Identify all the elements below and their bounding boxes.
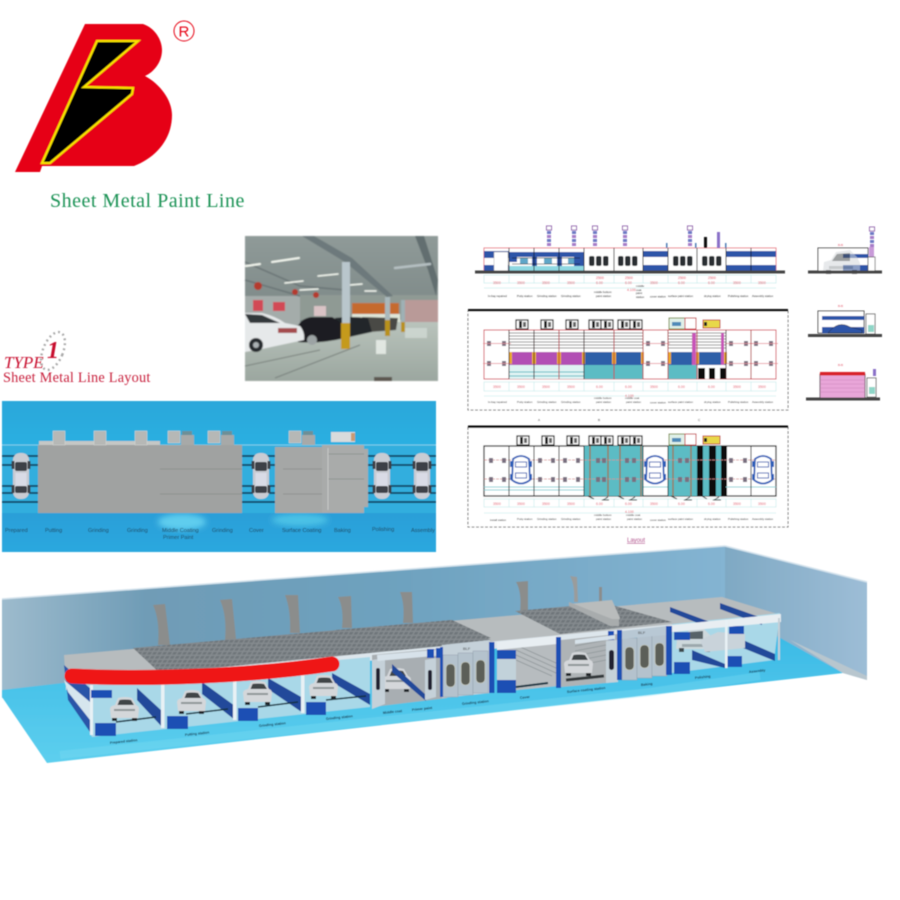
- CAD drawing: floor plan: 6.00: [708, 502, 715, 506]
- station labels: Prepared: [5, 528, 28, 534]
- photo: paint line workshop: [245, 236, 438, 381]
- CAD drawing: floor plan: B: [598, 418, 600, 422]
- equipment on top: [516, 318, 720, 329]
- CAD drawing: floor plan: 3500: [758, 502, 766, 506]
- station labels: middle bottom: [594, 513, 612, 517]
- floor station labels: Polishing: [695, 674, 711, 680]
- label: Layout: Layout: [627, 538, 645, 544]
- station labels: Grinding station: [561, 294, 581, 298]
- booth block: surface coating and baking: [275, 431, 368, 513]
- CAD drawing: front elevation: 3500: [758, 281, 766, 285]
- CAD drawing: roof plan: [468, 309, 788, 410]
- CAD drawing: floor plan: 6.00: [625, 502, 632, 506]
- station labels: In-bay repaired: [488, 294, 507, 298]
- station labels: [488, 396, 774, 404]
- station labels: Grinding station: [561, 517, 581, 521]
- CAD drawing: floor plan: 6.00: [678, 502, 685, 506]
- red annotation stroke: [72, 664, 332, 678]
- logo: red B lightning mark: [15, 21, 194, 172]
- booth block: putting to grinding: [38, 431, 242, 513]
- blue bands: [484, 251, 776, 271]
- CAD drawing: front elevation: 3500: [733, 281, 741, 285]
- exhaust stacks: [546, 226, 726, 248]
- station labels: Grinding station: [537, 517, 557, 521]
- dimension row: [484, 275, 776, 288]
- section one: [808, 227, 882, 274]
- floor station labels: Putting station: [185, 730, 209, 737]
- station labels: paint station: [596, 517, 612, 521]
- station labels: Surface Coating: [282, 528, 321, 534]
- white end bays: [483, 341, 778, 366]
- open booth bay three: [561, 630, 622, 687]
- floor band and rails: [2, 445, 436, 530]
- teal floors: [509, 365, 726, 379]
- station labels: Putty station: [517, 400, 533, 404]
- CAD drawing: floor plan: 4.100: [625, 510, 634, 514]
- station labels: Grinding: [127, 528, 148, 534]
- open booth bay two: [497, 636, 561, 693]
- CAD drawing: roof plan: 4.100: [625, 394, 634, 398]
- station labels: In-bay repaired: [488, 400, 507, 404]
- CAD drawing: front elevation: 6.00: [625, 281, 632, 285]
- heading: Type 1 Sheet Metal Line Layout: [3, 329, 151, 386]
- CAD drawing: floor plan: 3500: [650, 502, 658, 506]
- station labels: Grinding: [88, 528, 109, 534]
- 3D rendering: paint line hall: [2, 546, 867, 763]
- CAD drawing: front elevation: 6.00: [596, 281, 603, 285]
- paint booth door face two: BLF: [638, 630, 646, 635]
- yellow posts: [509, 352, 727, 364]
- CAD drawing: front elevation: 2500: [625, 276, 633, 280]
- station labels: Assembly station: [752, 517, 774, 521]
- CAD drawing: front elevation: 3500: [567, 281, 575, 285]
- section three: B-B: [838, 363, 843, 367]
- CAD drawing: floor plan: 6.00: [596, 502, 603, 506]
- station labels: paint: [636, 291, 642, 295]
- CAD drawing: roof plan: 6.00: [625, 385, 632, 389]
- blue car outlines: [510, 456, 774, 484]
- station labels: Polishing station: [728, 400, 749, 404]
- CAD drawing: roof plan: 3500: [542, 385, 550, 389]
- station labels: Middle Coating: [162, 528, 199, 534]
- paint booth door face one: BLF: [463, 646, 471, 651]
- floor station labels: Grinding station: [259, 721, 286, 728]
- panel: top-view blue layout: [2, 401, 436, 552]
- cell dividers: [509, 330, 751, 379]
- CAD drawing: roof plan: 3500: [493, 385, 501, 389]
- label: layout subtitle: Sheet Metal Line Layout: [3, 370, 151, 386]
- logo: red B body: [15, 24, 172, 172]
- station labels: Polishing station: [728, 294, 749, 298]
- right wall: [725, 546, 867, 680]
- station labels: drying station: [704, 517, 721, 521]
- CAD drawing: floor plan: [468, 418, 788, 544]
- station labels: Assembly station: [752, 400, 774, 404]
- station labels: Grinding: [212, 528, 233, 534]
- floor station labels: Grinding station: [326, 714, 353, 721]
- station labels: Polishing station: [728, 517, 749, 521]
- station labels: Primer Paint: [163, 535, 194, 541]
- section three: [806, 363, 880, 400]
- logo: black bolt with yellow outline: [42, 41, 138, 163]
- CAD drawing: floor plan: 3500: [542, 502, 550, 506]
- floor: [2, 607, 843, 763]
- front face band: [66, 614, 781, 690]
- station labels: surface paint station: [668, 517, 693, 521]
- door swing marks: [588, 496, 721, 500]
- station labels: [490, 513, 774, 522]
- plan guide lines: [484, 458, 776, 490]
- CAD drawing: front elevation: 2500: [678, 276, 686, 280]
- station labels: station: [636, 295, 645, 299]
- CAD drawing: roof plan: 3500: [733, 385, 741, 389]
- CAD drawing: roof plan: 6.00: [678, 385, 685, 389]
- station labels: [488, 284, 774, 299]
- station labels: Polishing: [372, 527, 394, 533]
- slats: [509, 333, 726, 348]
- CAD drawing: roof plan: 6.00: [596, 385, 603, 389]
- station labels: coat: [636, 288, 642, 292]
- brown rails: [590, 446, 691, 496]
- floor station labels: Middle coat: [383, 709, 403, 715]
- open prep bays: [64, 657, 370, 737]
- floor station labels: Prepared station: [110, 738, 138, 745]
- teal bays: [584, 446, 727, 496]
- CAD drawing: front elevation: 3500: [650, 281, 658, 285]
- station labels: Cover: [249, 528, 264, 534]
- floor station labels: Baking: [641, 682, 653, 687]
- CAD drawing: roof plan: 3500: [650, 385, 658, 389]
- station labels: paint station: [596, 294, 612, 298]
- CAD drawing: floor plan: 3500: [517, 502, 525, 506]
- booth doors: [589, 256, 722, 266]
- station labels: cover station: [650, 400, 666, 404]
- floor station labels: Grinding station: [462, 699, 489, 706]
- station labels: Putty station: [517, 294, 533, 298]
- station labels: drying station: [704, 294, 721, 298]
- floor station labels: Surface coating station: [567, 686, 606, 694]
- CAD drawing: front elevation: 2500: [596, 276, 604, 280]
- station labels: middle coat: [625, 396, 640, 400]
- logo: registered mark: R: [178, 24, 190, 40]
- CAD drawing: roof plan: 6.00: [708, 385, 715, 389]
- CAD drawing: front elevation: 4.100: [627, 288, 636, 292]
- floor station labels: Assembly: [749, 668, 766, 674]
- CAD drawing: front elevation: 6.00: [678, 281, 685, 285]
- station labels: Grinding station: [537, 400, 557, 404]
- station labels: paint station: [627, 517, 643, 521]
- station labels: middle bottom: [594, 396, 612, 400]
- open finishing bays: [670, 603, 781, 674]
- CAD drawing: roof plan: 3500: [567, 385, 575, 389]
- station labels: drying station: [704, 400, 721, 404]
- floor station labels: [110, 668, 766, 745]
- title: Sheet Metal Paint Line: Sheet Metal Paint Line: [50, 190, 245, 212]
- dimension row: [484, 382, 776, 396]
- CAD drawing: front elevation: 3500: [542, 281, 550, 285]
- station labels: Assembly: [411, 528, 435, 534]
- CAD drawing: floor plan: 3500: [733, 502, 741, 506]
- purple extraction units: [509, 352, 584, 366]
- CAD drawing: front elevation: 3500: [517, 281, 525, 285]
- decorative dotted ring: [36, 329, 70, 373]
- cars on rails: [12, 453, 432, 499]
- station labels: Grinding station: [537, 294, 557, 298]
- logo: registered mark: [174, 21, 194, 41]
- label: 1: 1: [47, 338, 59, 364]
- station labels: install station: [490, 518, 507, 522]
- paint booth door face one: [440, 640, 494, 698]
- CAD drawing: roof plan: 3500: [758, 385, 766, 389]
- station labels: Grinding station: [561, 400, 581, 404]
- door bays: [372, 648, 447, 709]
- station labels: middle bottom: [594, 290, 612, 294]
- paint booth door face two: [622, 626, 672, 680]
- station labels: middle: [636, 284, 645, 288]
- dimension row: [484, 499, 776, 513]
- CAD drawing: front elevation: 6.00: [708, 281, 715, 285]
- station labels: cover station: [650, 518, 666, 522]
- station labels: Assembly station: [752, 294, 774, 298]
- equipment on top: [517, 434, 720, 445]
- cell dividers: [509, 446, 751, 496]
- station labels: Putting: [45, 528, 62, 534]
- floor station labels: Primer paint: [412, 706, 433, 712]
- station labels: paint station: [626, 400, 642, 404]
- CAD drawing: front elevation: 2500: [708, 276, 716, 280]
- section two: B-B: [838, 304, 843, 308]
- CAD drawing: side sections: [806, 227, 882, 400]
- station labels: Putty station: [517, 517, 533, 521]
- ground line: [475, 270, 785, 274]
- booth roof: [64, 597, 781, 686]
- CAD drawing: front elevation: [475, 226, 785, 299]
- blue extraction units: [584, 352, 726, 366]
- CAD drawing: floor plan: 3500: [567, 502, 575, 506]
- CAD drawing: floor plan: A: [538, 418, 540, 422]
- floor station labels: Cover: [520, 695, 531, 700]
- section two: [808, 304, 882, 337]
- station labels: surface paint station: [668, 294, 693, 298]
- label: TYPE: TYPE: [4, 353, 44, 372]
- back wall: [2, 546, 725, 698]
- CAD drawing: front elevation: 3500: [493, 281, 501, 285]
- station labels: surface paint station: [668, 400, 693, 404]
- exhaust ducts: [153, 576, 602, 645]
- CAD drawing: roof plan: 3500: [517, 385, 525, 389]
- section one: B-B: [838, 243, 843, 247]
- CAD drawing: floor plan: C: [698, 418, 701, 422]
- station labels: cover station: [650, 294, 666, 298]
- CAD drawing: floor plan: 3500: [493, 502, 501, 506]
- station labels: [5, 527, 435, 541]
- station labels: Baking: [334, 528, 351, 534]
- station labels: middle coat: [626, 513, 641, 517]
- station labels: paint station: [596, 400, 612, 404]
